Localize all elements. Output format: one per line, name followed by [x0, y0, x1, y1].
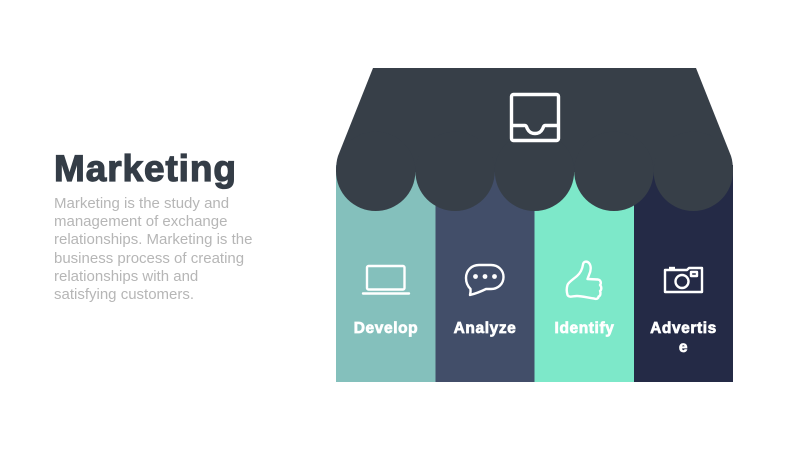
- icon: camera: [665, 268, 702, 292]
- description text: Marketing is the study and: [54, 195, 229, 212]
- description text: satisfying customers.: [54, 286, 194, 303]
- label: develop: Develop: [354, 320, 418, 337]
- column: advertise: [634, 165, 733, 382]
- label: analyze: Analyze: [454, 320, 516, 337]
- icon: thumbs up: [567, 262, 601, 299]
- label: advertise: Advertis: [650, 320, 717, 337]
- column: identify: [534, 165, 634, 382]
- icon: speech bubble: [466, 265, 504, 295]
- column: analyze: [436, 165, 534, 382]
- awning: [336, 68, 733, 211]
- icon: laptop: [363, 266, 409, 294]
- description text: [54, 195, 252, 303]
- title: Marketing: [54, 148, 237, 189]
- description text: management of exchange: [54, 213, 227, 230]
- description text: relationships with and: [54, 268, 198, 285]
- description text: relationships. Marketing is the: [54, 231, 252, 248]
- label: identify: Identify: [555, 320, 614, 337]
- icon: inbox tray: [512, 94, 558, 140]
- label: advertise: e: [679, 339, 688, 356]
- column: develop: [336, 165, 436, 382]
- description text: business process of creating: [54, 250, 244, 267]
